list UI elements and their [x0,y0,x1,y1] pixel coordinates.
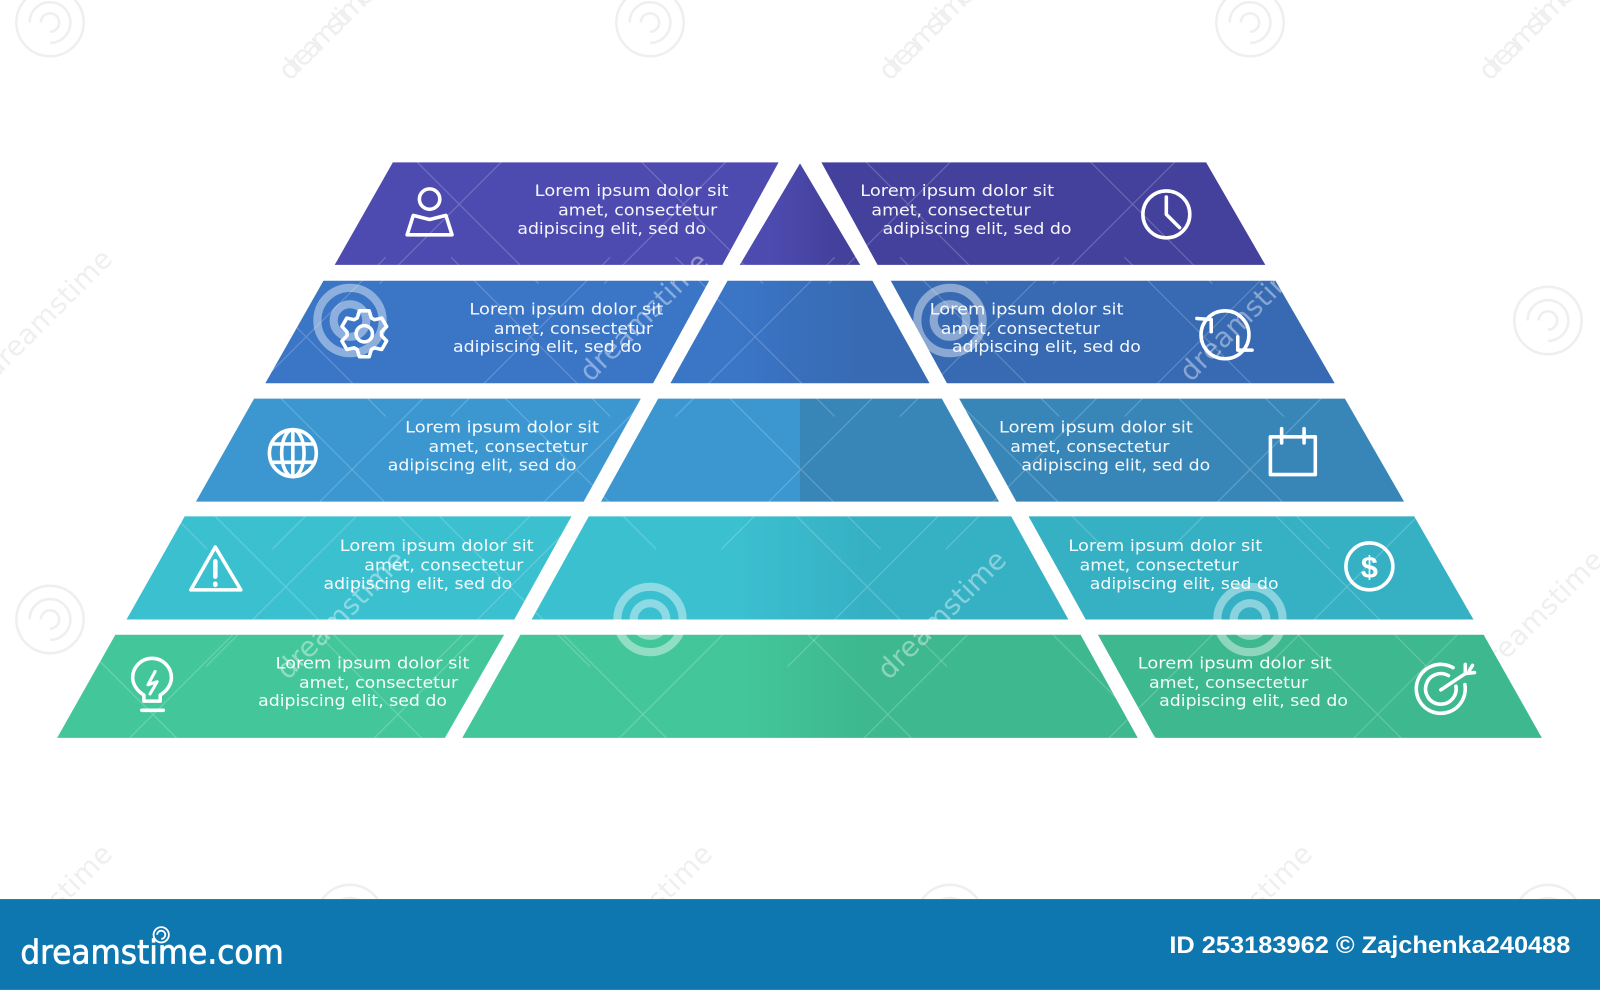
watermark lines over tiers [48,125,1457,794]
text: tier 4 left: amet, consectetur [364,556,524,575]
text: tier 4 left: adipiscing elit, sed do [323,574,512,593]
icon: target with arrow [1416,664,1474,713]
pyramid tier 4 [127,516,1473,619]
icon: warning triangle [191,547,241,590]
icon: gear [342,311,387,357]
icon: dollar coin [1346,543,1393,590]
text: tier 5 left: amet, consectetur [299,673,458,692]
text: tier 2 left [453,299,663,356]
watermark spirals and wordmarks over tiers: dreamstime [270,544,412,686]
text: tier 5 right: amet, consectetur [1149,673,1308,692]
icon: refresh arrows [1197,311,1252,359]
pyramid tier 2 [265,281,1335,383]
text: tier 1 left: Lorem ipsum dolor sit [535,181,729,200]
watermark spirals and wordmarks over tiers: dreamstime [573,246,715,388]
icon: light bulb [133,658,171,710]
text: tier 3 right: adipiscing elit, sed do [1021,456,1210,475]
text: tier 5 right: Lorem ipsum dolor sit [1138,653,1332,672]
text: tier 3 left [388,418,599,475]
text: tier 1 left: adipiscing elit, sed do [517,219,706,238]
text: tier 1 right [860,181,1071,238]
text: tier 2 right: adipiscing elit, sed do [952,337,1141,356]
text: tier 1 right: amet, consectetur [871,200,1031,219]
watermark spirals and wordmarks over tiers: dreamstime [1173,246,1315,388]
text: tier 3 right: Lorem ipsum dolor sit [999,418,1193,437]
watermark spirals and wordmarks over tiers [270,246,1315,686]
text: tier 3 left: adipiscing elit, sed do [388,456,577,475]
pyramid tier 5 [57,635,1542,738]
text: tier 3 left: Lorem ipsum dolor sit [405,418,599,437]
text: tier 4 right: adipiscing elit, sed do [1090,574,1279,593]
text: tier 5 left: Lorem ipsum dolor sit [276,653,469,672]
text: tier 2 right: amet, consectetur [941,319,1100,338]
text: tier 3 right: amet, consectetur [1010,437,1170,456]
text: tier 3 right [999,418,1210,475]
text: tier 4 left: Lorem ipsum dolor sit [340,536,534,555]
icon: dollar coin: $ [1361,551,1378,585]
text: tier 4 right [1068,536,1279,593]
icon: person with map [407,189,452,235]
footer logo spiral [154,927,169,942]
footer image id and author: ID 253183962 © Zajchenka240488 [1169,932,1570,959]
text: tier 2 left: Lorem ipsum dolor sit [469,299,663,318]
text: tier 4 left [323,536,534,593]
footer bar [0,899,1600,990]
pyramid tier 3 [196,399,1404,502]
text: tier 2 right: Lorem ipsum dolor sit [930,299,1123,318]
icon: calendar [1270,429,1315,475]
text: tier 1 right: Lorem ipsum dolor sit [860,181,1054,200]
pyramid tier 1 [335,162,1265,265]
icon: clock [1143,191,1190,238]
text: tier 1 left [517,181,729,238]
text: tier 5 right [1138,653,1348,710]
watermark spirals and wordmarks over tiers: dreamstime [871,544,1013,686]
icon: globe [269,430,316,477]
text: tier 5 left [258,653,469,710]
text: tier 1 right: adipiscing elit, sed do [883,219,1071,238]
text: tier 3 left: amet, consectetur [429,437,588,456]
text: tier 1 left: amet, consectetur [558,200,718,219]
text: tier 4 right: amet, consectetur [1080,556,1239,575]
watermark on white background: dreamstime [1177,838,1319,980]
text: tier 5 right: adipiscing elit, sed do [1159,691,1348,710]
watermark on white background: dreamstime [577,838,719,980]
text: tier 2 left: amet, consectetur [494,319,653,338]
text: tier 2 right [930,299,1141,356]
text: tier 2 left: adipiscing elit, sed do [453,337,642,356]
text: tier 5 left: adipiscing elit, sed do [258,691,447,710]
footer logo wordmark: dreamstime.com [20,933,284,971]
text: tier 4 right: Lorem ipsum dolor sit [1068,536,1262,555]
